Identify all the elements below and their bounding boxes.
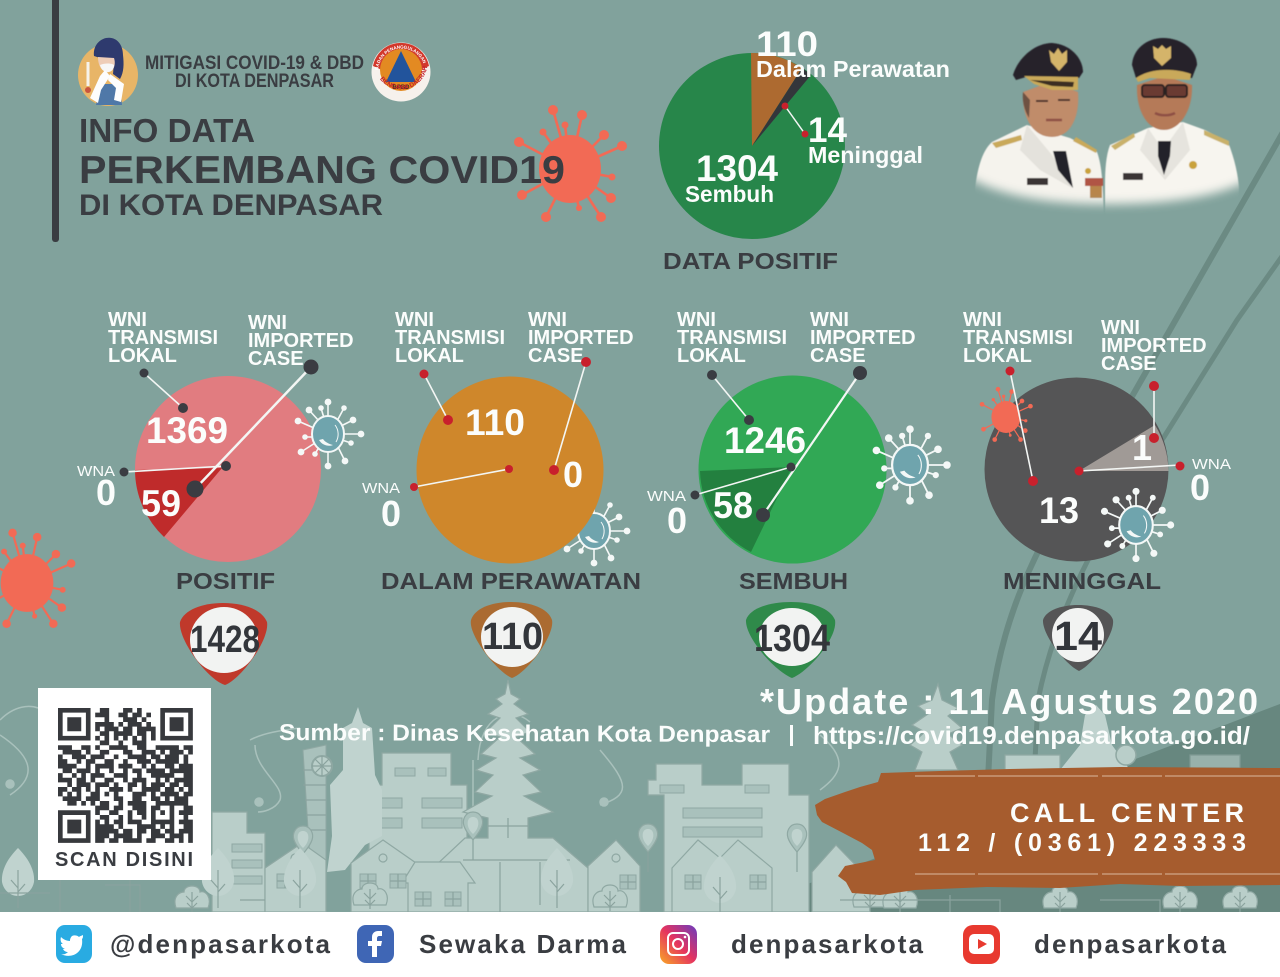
label: wni imported case: IMPORTED — [528, 327, 634, 349]
footer bar — [0, 912, 1280, 977]
icon: facebook — [357, 925, 394, 963]
main title: PERKEMBANG COVID19 — [79, 149, 565, 192]
connectors — [1006, 366, 1184, 486]
values — [647, 420, 806, 541]
values: 58 — [713, 485, 753, 526]
icon: woman with mask and thermometer — [78, 38, 138, 106]
heading: dalam perawatan: DALAM PERAWATAN — [381, 568, 641, 594]
heading: sembuh: SEMBUH — [739, 568, 848, 594]
chart: data positif pie: 110 — [756, 25, 818, 64]
skyline: building windows — [232, 768, 769, 884]
skyline: statue — [327, 707, 382, 872]
chart: data positif pie: Meninggal — [808, 142, 923, 168]
connectors — [410, 357, 591, 491]
skyline: hanging ornaments — [0, 706, 839, 830]
icon: BPBD emblem: BADAN PENANGGULANGAN — [375, 45, 426, 70]
badge: 1304: 1304 — [754, 618, 830, 660]
label: wni transmisi lokal: TRANSMISI — [677, 327, 787, 349]
header organisation text: MITIGASI COVID-19 & DBD — [145, 53, 364, 74]
update date: *Update : 11 Agustus 2020 — [760, 681, 1258, 722]
skyline: pagoda left — [433, 680, 588, 912]
skyline: statue side tower and wheel — [303, 745, 332, 860]
handle: facebook: Sewaka Darma — [419, 929, 627, 959]
values: 0 — [1190, 467, 1210, 508]
chart: sembuh pie — [698, 376, 886, 564]
chart: positif pie — [135, 376, 321, 562]
badge: 1428 — [180, 603, 267, 685]
dark background wedge — [734, 704, 1280, 912]
header block — [78, 38, 430, 106]
decorative curved bands — [988, 120, 1280, 780]
skyline: houses — [265, 840, 870, 912]
icon: BPBD emblem: BPBD — [392, 85, 410, 91]
skyline: statue right — [1060, 705, 1130, 770]
values: WNA — [1192, 456, 1231, 473]
skyline: ground strip — [0, 880, 1160, 912]
accent bar — [52, 0, 59, 242]
connectors — [690, 366, 867, 522]
values — [77, 410, 228, 524]
icon: youtube — [963, 925, 1000, 964]
label: wni imported case: IMPORTED — [1101, 335, 1207, 357]
call center text — [918, 798, 1246, 857]
badge: 1428: 1428 — [190, 619, 260, 661]
values: 1369 — [146, 410, 228, 451]
skyline: ornaments — [293, 812, 807, 874]
chart: data positif pie: Dalam Perawatan — [756, 56, 950, 82]
values: 59 — [141, 483, 181, 524]
panel: meninggal — [963, 309, 1231, 671]
values: 0 — [667, 500, 687, 541]
icon: white virus meninggal — [1102, 489, 1173, 561]
heading: meninggal: MENINGGAL — [1003, 568, 1161, 594]
skyline: trees — [2, 848, 1257, 915]
panel: positif — [77, 309, 364, 685]
label: wni transmisi lokal: TRANSMISI — [963, 327, 1073, 349]
label: wni imported case: CASE — [248, 348, 304, 370]
source line: Sumber : Dinas Kesehatan Kota Denpasar — [279, 719, 770, 747]
badge: 14: 14 — [1054, 613, 1102, 659]
label: wni transmisi lokal: LOKAL — [108, 345, 177, 367]
main title — [79, 112, 565, 222]
label: wni transmisi lokal: TRANSMISI — [108, 327, 218, 349]
values: 1 — [1132, 427, 1152, 468]
label: wni imported case: WNI — [528, 309, 567, 331]
label: wni imported case: CASE — [810, 345, 866, 367]
icon: white virus sembuh — [873, 426, 950, 504]
icon: BPBD emblem — [372, 42, 430, 102]
label: wni transmisi lokal: LOKAL — [395, 345, 464, 367]
values: 0 — [563, 454, 583, 495]
chart: dalam perawatan pie — [416, 376, 604, 564]
heading: data positif: DATA POSITIF — [663, 248, 838, 274]
badge: 110 — [471, 602, 552, 678]
icon: coral virus left edge — [0, 529, 75, 628]
call center brush — [815, 767, 1280, 895]
values — [362, 402, 583, 534]
label: wni transmisi lokal: WNI — [963, 309, 1002, 331]
divider bar — [790, 725, 793, 746]
skyline: pagoda left base lines — [463, 818, 570, 912]
handle: twitter: @denpasarkota — [110, 929, 331, 959]
values: WNA — [77, 463, 115, 480]
label: wni transmisi lokal: WNI — [395, 309, 434, 331]
panel: dalam perawatan — [362, 309, 641, 678]
label: wni imported case: WNI — [810, 309, 849, 331]
main title: INFO DATA — [79, 112, 255, 149]
label: wni imported case: IMPORTED — [248, 330, 354, 352]
right official — [1105, 38, 1239, 220]
label: wni imported case: IMPORTED — [810, 327, 916, 349]
values: 13 — [1039, 490, 1079, 531]
label: wni transmisi lokal: WNI — [108, 309, 147, 331]
label: wni transmisi lokal: LOKAL — [963, 345, 1032, 367]
call center text: CALL CENTER — [1010, 798, 1244, 828]
qr panel — [38, 688, 211, 880]
scan caption: SCAN DISINI — [55, 849, 193, 871]
skyline: far buildings — [212, 753, 1240, 912]
icon: large coral virus — [514, 105, 627, 222]
chart: data positif pie: 1304 — [696, 148, 778, 189]
label: wni imported case: CASE — [528, 345, 584, 367]
chart: data positif pie — [659, 25, 950, 239]
call center text: 112 / (0361) 223333 — [918, 829, 1246, 857]
main title: DI KOTA DENPASAR — [79, 189, 383, 222]
icon: coral virus meninggal — [980, 387, 1033, 442]
values: WNA — [647, 488, 686, 505]
icon: white virus dalam perawatan — [561, 496, 630, 566]
chart: meninggal pie — [984, 378, 1168, 562]
header organisation text — [145, 53, 364, 92]
badge: 110: 110 — [482, 616, 543, 658]
label: wni imported case: WNI — [248, 312, 287, 334]
values: WNA — [362, 480, 400, 497]
values — [1039, 427, 1231, 531]
values: 0 — [381, 493, 401, 534]
chart: data positif pie: Sembuh — [685, 181, 774, 207]
header organisation text: DI KOTA DENPASAR — [175, 71, 334, 92]
left official — [975, 43, 1104, 220]
handle: youtube: denpasarkota — [1034, 929, 1227, 959]
values: 110 — [465, 402, 525, 443]
qr code — [58, 708, 193, 843]
label: wni imported case: CASE — [1101, 353, 1157, 375]
skyline: pagoda right — [910, 684, 962, 770]
panel: sembuh — [647, 309, 950, 678]
skyline: wheel right — [1116, 745, 1136, 765]
connectors — [120, 360, 318, 498]
badge: 1304 — [746, 602, 835, 678]
values: 0 — [96, 472, 116, 513]
label: wni transmisi lokal: WNI — [677, 309, 716, 331]
source url: https://covid19.denpasarkota.go.id/ — [813, 722, 1250, 750]
skyline illustration — [0, 680, 1257, 915]
chart: data positif pie: 14 — [808, 111, 848, 150]
icon: instagram — [660, 925, 697, 964]
portrait: two officials — [975, 38, 1239, 220]
values: 1246 — [724, 420, 806, 461]
label: wni transmisi lokal: TRANSMISI — [395, 327, 505, 349]
heading: positif: POSITIF — [176, 568, 275, 594]
icon: BPBD emblem: BENCANA DAERAH — [380, 66, 428, 90]
badge: 14 — [1043, 605, 1113, 671]
icon: twitter — [56, 925, 92, 963]
label: wni transmisi lokal: LOKAL — [677, 345, 746, 367]
icon: white virus positif — [295, 399, 364, 469]
label: wni imported case: WNI — [1101, 317, 1140, 339]
handle: instagram: denpasarkota — [731, 929, 924, 959]
